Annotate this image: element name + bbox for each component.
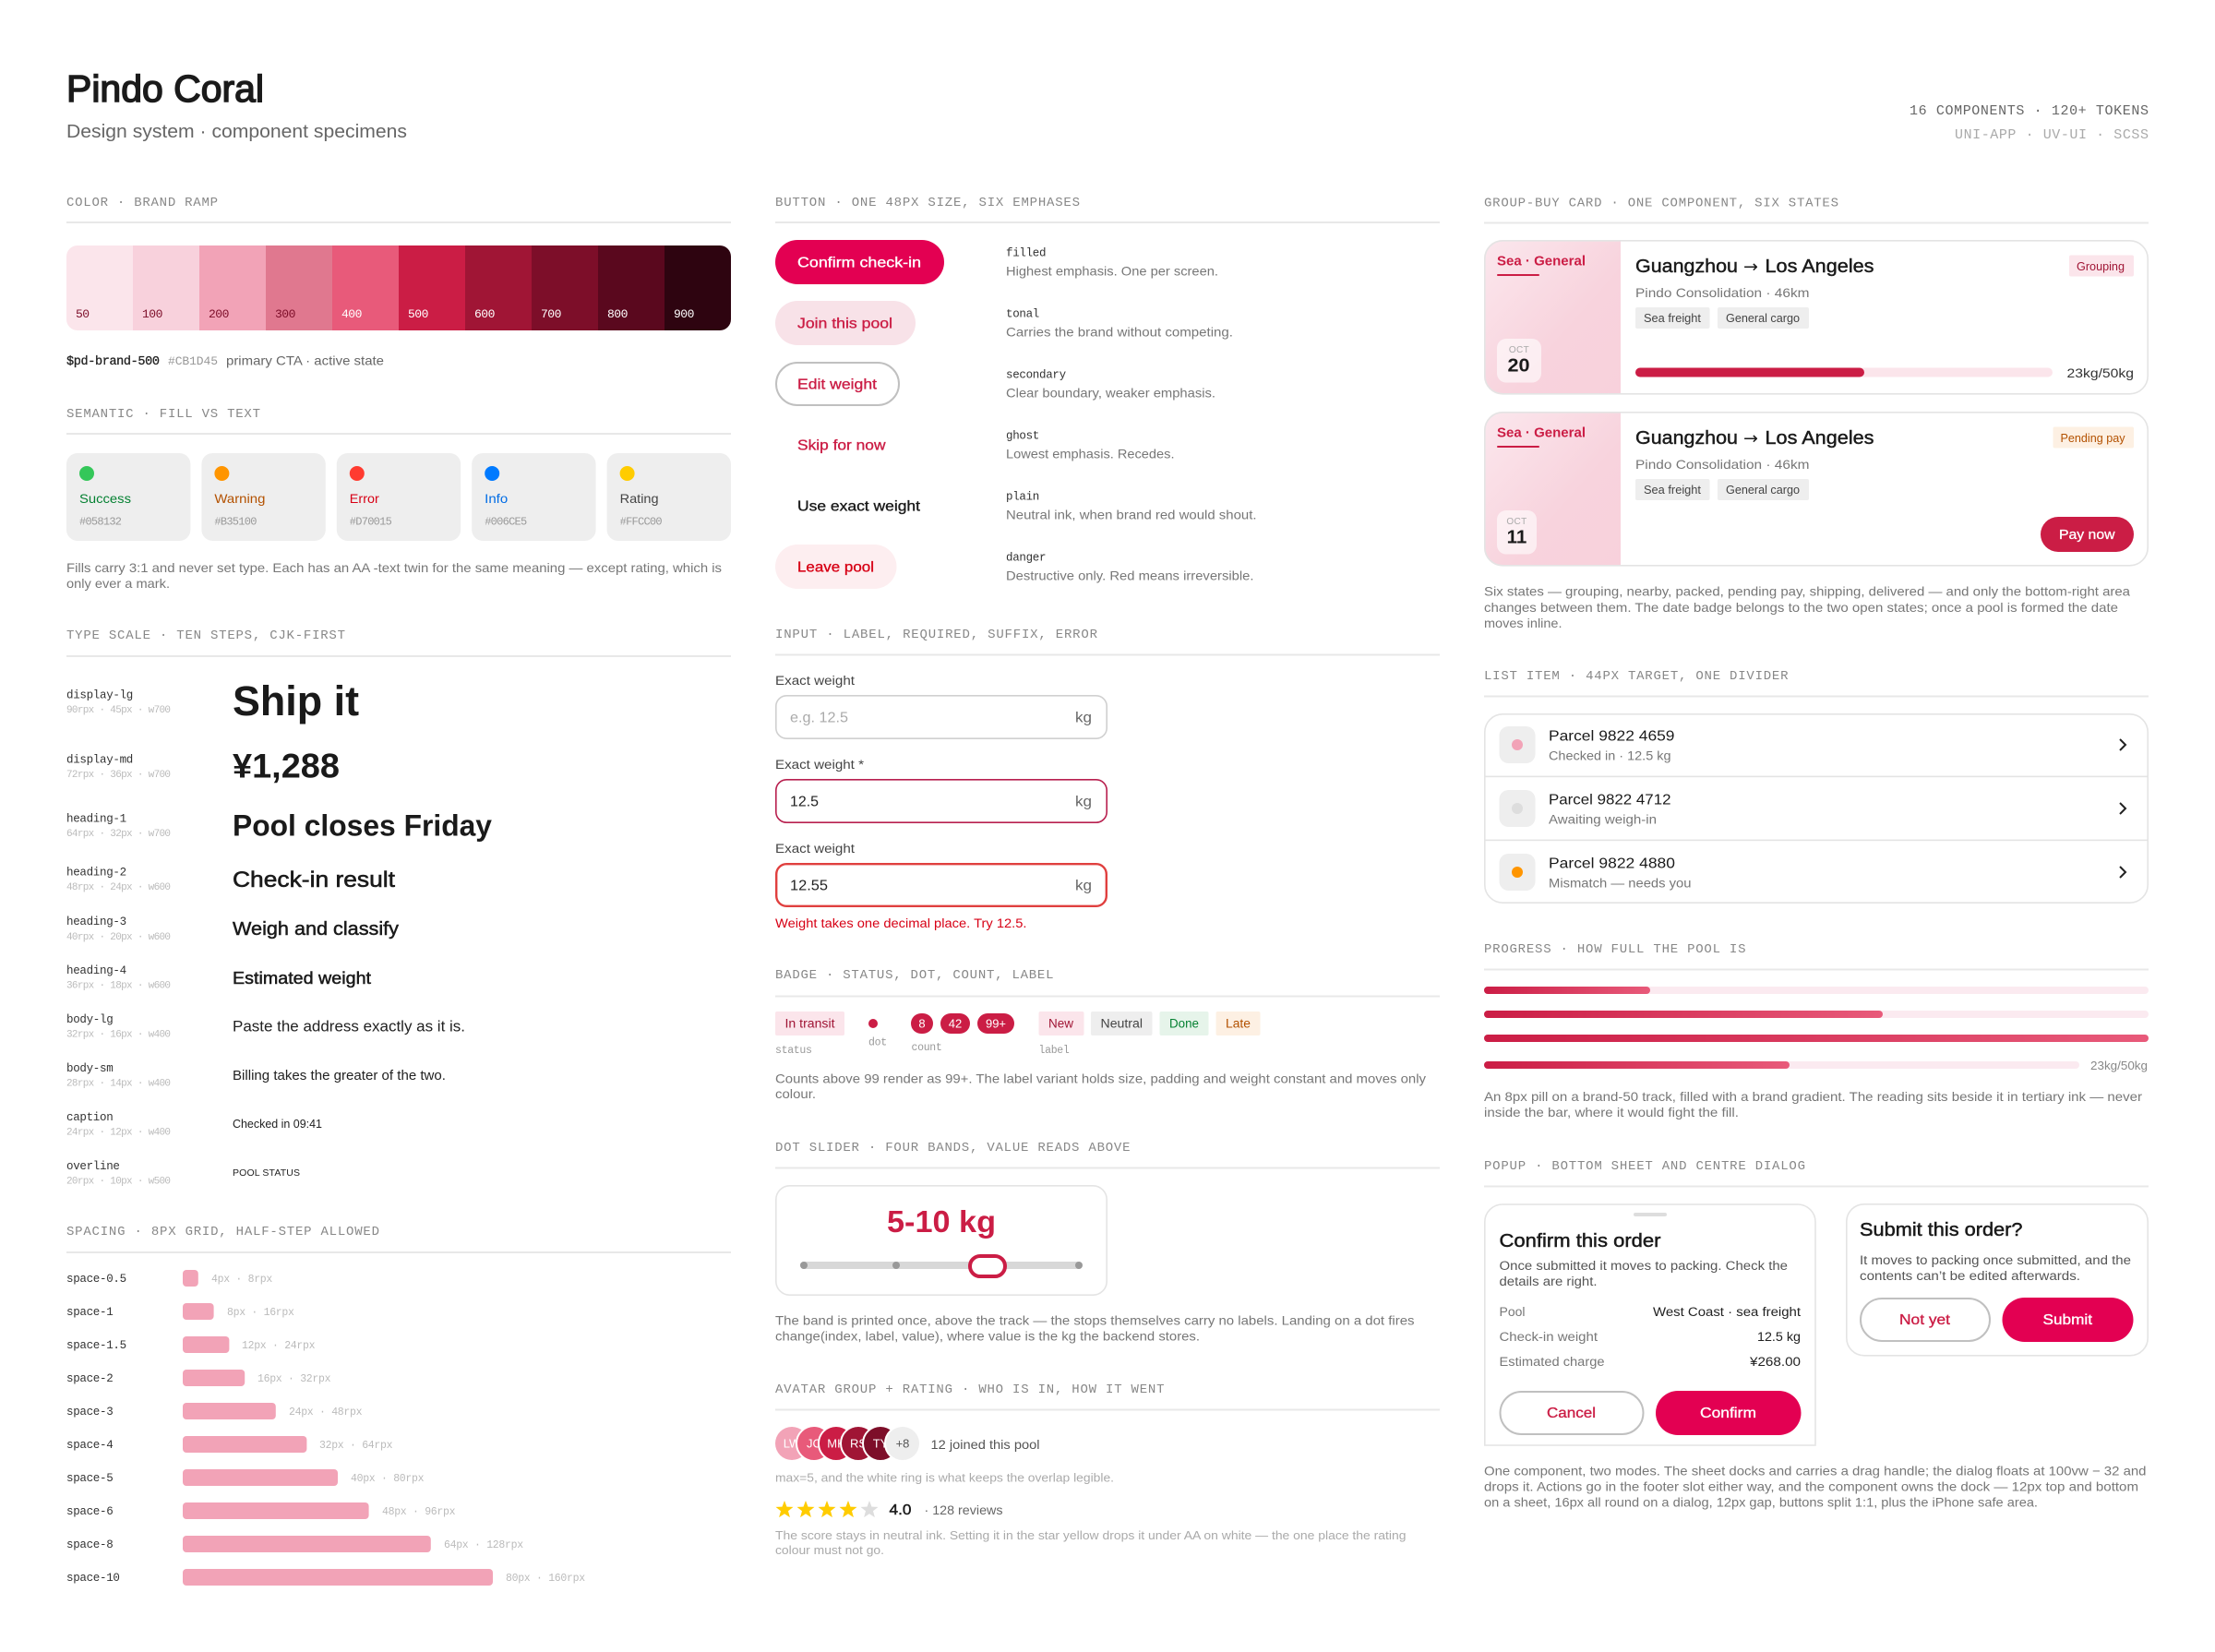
- note: slider: [775, 1312, 1414, 1344]
- colour ramp: 100: [142, 307, 162, 321]
- list row: 4712: Parcel 9822 4712: [1549, 792, 1671, 808]
- card: grouping state: 20: [1508, 354, 1530, 377]
- colour ramp: 400: [341, 307, 362, 321]
- progress bar: 60%: [1484, 1011, 2149, 1018]
- bottom sheet: Confirm: [1700, 1406, 1756, 1421]
- heading: slider: DOT SLIDER · FOUR BANDS, VALUE READS ABOVE: [775, 1141, 1130, 1155]
- row: space-1.5: 12px · 24rpx: [242, 1340, 316, 1352]
- desc: plain: [1006, 491, 1257, 522]
- heading: color: COLOR · BRAND RAMP: [66, 196, 218, 210]
- slider card: [776, 1186, 1107, 1295]
- row: space-10: 80px · 160rpx: [506, 1573, 585, 1585]
- row: space-5: 40px · 80rpx: [351, 1473, 425, 1485]
- row: overline: [66, 1160, 300, 1187]
- card: info: [472, 453, 596, 541]
- progress bar: with reading: [1484, 1059, 2148, 1072]
- bottom sheet: ¥268.00: [1749, 1355, 1801, 1369]
- badge: count: [911, 1013, 1014, 1054]
- row: display-md: ¥1,288: [233, 748, 340, 784]
- avatar group: TY: [873, 1436, 889, 1451]
- card: warning: [201, 453, 326, 541]
- token line: primary CTA · active state: [226, 353, 384, 367]
- heading: badge: BADGE · STATUS, DOT, COUNT, LABEL: [775, 968, 1054, 983]
- desc: plain: Neutral ink, when brand red would shout.: [1006, 508, 1257, 522]
- row: heading-2: 48rpx · 24px · w600: [66, 882, 171, 893]
- row: display-lg: display-lg: [66, 688, 133, 701]
- input: required: 12.5: [790, 794, 819, 810]
- card: success: [66, 453, 190, 541]
- row: space-8: [66, 1536, 523, 1552]
- row: heading-1: Pool closes Friday: [233, 808, 492, 842]
- heading: list: LIST ITEM · 44PX TARGET, ONE DIVIDER: [1484, 669, 1789, 684]
- header meta: [1910, 103, 2149, 143]
- row: caption: [66, 1111, 322, 1139]
- heading: button: BUTTON · ONE 48PX SIZE, SIX EMPHASES: [775, 196, 1080, 210]
- note: progress: inside the bar, where it would fight the fill.: [1484, 1105, 1739, 1119]
- button: danger: [775, 545, 897, 589]
- badge: labels: Neutral: [1100, 1017, 1143, 1030]
- row: caption: caption: [66, 1111, 113, 1124]
- list row: 4880: Parcel 9822 4880: [1549, 856, 1675, 871]
- card title: [1635, 256, 1874, 277]
- desc: tonal: [1006, 308, 1233, 340]
- badge: labels: Late: [1226, 1017, 1251, 1030]
- desc: danger: danger: [1006, 552, 1046, 565]
- centre dialog: It moves to packing once submitted, and the: [1860, 1253, 2131, 1267]
- bottom sheet: Cancel: [1547, 1406, 1596, 1421]
- bottom sheet: details are right.: [1499, 1275, 1597, 1288]
- desc: ghost: ghost: [1006, 430, 1039, 443]
- row: space-1: 8px · 16rpx: [227, 1307, 294, 1319]
- row: body-lg: body-lg: [66, 1013, 113, 1026]
- bottom sheet: West Coast · sea freight: [1653, 1305, 1801, 1319]
- panel: semantic colours: [66, 407, 731, 591]
- row: space-0.5: 4px · 8rpx: [211, 1274, 272, 1286]
- row: space-6: [66, 1502, 456, 1519]
- row: space-10: space-10: [66, 1572, 120, 1585]
- card: success: #058132: [79, 515, 122, 528]
- row: body-sm: body-sm: [66, 1062, 113, 1075]
- desc: tonal: tonal: [1006, 308, 1039, 321]
- row: space-3: 24px · 48rpx: [289, 1407, 363, 1419]
- card: pending pay state: Pay now: [2059, 527, 2115, 543]
- badge: status: In transit: [784, 1017, 835, 1030]
- colour ramp: 500: [408, 307, 428, 321]
- row: body-sm: 28rpx · 14px · w400: [66, 1078, 171, 1089]
- desc: plain: plain: [1006, 491, 1039, 504]
- input: required: [775, 758, 1107, 822]
- note: popup: on a sheet, 16px all round on a dialog, 12px gap, buttons split 1:1, plus the iPhone safe area.: [1484, 1495, 2038, 1510]
- list row: 4712: [1499, 790, 2125, 827]
- note: popup: One component, two modes. The sheet docks and carries a drag handle; the dialog floats at 100vw − 32 and: [1484, 1464, 2147, 1478]
- card: pending pay state: Sea freight: [1644, 484, 1702, 497]
- avatar group: LW: [784, 1436, 801, 1451]
- note: progress: An 8px pill on a brand-50 track, filled with a brand gradient. The reading sits beside it in tertiary ink — never: [1484, 1089, 2142, 1104]
- centre dialog: Not yet: [1899, 1312, 1951, 1328]
- panel: brand ramp: [66, 196, 731, 369]
- note: group-buy: [1484, 583, 2130, 630]
- input: error: Exact weight: [775, 842, 855, 856]
- button: tonal: [775, 301, 916, 345]
- panel: group-buy cards: [1484, 196, 2149, 630]
- centre dialog: Submit this order?: [1860, 1219, 2023, 1240]
- panel: list items: [1484, 669, 2149, 903]
- row: space-0.5: space-0.5: [66, 1273, 126, 1286]
- input: default: Exact weight: [775, 674, 855, 688]
- card title: Guangzhou: [1635, 427, 1738, 449]
- card: grouping state: Sea freight: [1644, 312, 1702, 325]
- input: error: [775, 842, 1107, 930]
- card: grouping state: Sea · General: [1497, 255, 1586, 269]
- note: rating: [775, 1528, 1407, 1557]
- avatar caption: 12 joined this pool: [930, 1437, 1039, 1452]
- note: semantic: Fills carry 3:1 and never set type. Each has an AA -text twin for the same meaning — except rating, which is: [66, 560, 722, 575]
- row: overline: POOL STATUS: [233, 1167, 300, 1179]
- desc: secondary: [1006, 369, 1215, 401]
- card: warning: #B35100: [214, 515, 257, 528]
- badge: count: 8: [918, 1017, 926, 1030]
- card: pending pay state: Pindo Consolidation · 46km: [1635, 457, 1809, 472]
- token line: $pd-brand-500: [66, 355, 160, 369]
- heading: type scale: TYPE SCALE · TEN STEPS, CJK-FIRST: [66, 628, 345, 643]
- card: pending pay state: Pending pay: [2060, 432, 2125, 445]
- list row: 4880: [1499, 854, 2125, 891]
- badge: count: 42: [949, 1017, 962, 1030]
- input: default: e.g. 12.5: [790, 711, 848, 725]
- button: danger: Leave pool: [797, 559, 874, 576]
- colour ramp: 800: [607, 307, 628, 321]
- button: secondary: Edit weight: [797, 377, 878, 393]
- row: heading-3: 40rpx · 20px · w600: [66, 932, 171, 943]
- card: pending pay state: Sea · General: [1497, 426, 1586, 441]
- card title: →: [1743, 257, 1758, 277]
- card: pending pay state: [1484, 412, 2148, 567]
- avatar group: RS: [850, 1436, 867, 1451]
- note: slider: change(index, label, value), where value is the kg the backend stores.: [775, 1329, 1200, 1344]
- header meta: UNI-APP · UV-UI · SCSS: [1955, 127, 2149, 143]
- row: space-4: [66, 1436, 393, 1453]
- row: display-lg: 90rpx · 45px · w700: [66, 705, 171, 716]
- token line: [66, 353, 384, 369]
- bottom sheet: 12.5 kg: [1757, 1330, 1801, 1344]
- row: display-lg: Ship it: [233, 677, 359, 724]
- card title: →: [1743, 429, 1758, 449]
- row: space-3: [66, 1403, 363, 1419]
- card: grouping state: 23kg/50kg: [2067, 365, 2134, 380]
- row: overline: overline: [66, 1160, 120, 1173]
- badge: count: count: [912, 1042, 942, 1054]
- card: warning: Warning: [214, 491, 265, 506]
- progress bar: with reading: 23kg/50kg: [2090, 1059, 2148, 1072]
- row: space-4: 32px · 64rpx: [319, 1440, 393, 1452]
- row: caption: Checked in 09:41: [233, 1118, 322, 1131]
- rating stars: [775, 1501, 879, 1517]
- progress bar: 100%: [1484, 1035, 2149, 1042]
- button: plain: Use exact weight: [797, 498, 921, 515]
- list card: [1485, 714, 2148, 903]
- desc: filled: filled: [1006, 247, 1046, 260]
- input: required: kg: [1075, 794, 1092, 810]
- panel: inputs: [775, 628, 1440, 930]
- list row: 4712: Awaiting weigh-in: [1549, 812, 1657, 827]
- note: semantic: [66, 560, 722, 591]
- row: caption: 24rpx · 12px · w400: [66, 1128, 171, 1139]
- card: pending pay state: 11: [1507, 526, 1527, 548]
- panel: badges: [775, 968, 1440, 1101]
- list row: 4659: Checked in · 12.5 kg: [1549, 749, 1670, 762]
- panel: type scale: [66, 628, 731, 1187]
- card: grouping state: OCT: [1509, 345, 1529, 355]
- card title: Los Angeles: [1765, 427, 1874, 449]
- row: space-4: space-4: [66, 1439, 113, 1452]
- centre dialog: Submit: [2043, 1312, 2093, 1328]
- row: heading-4: Estimated weight: [233, 968, 371, 988]
- row: space-8: space-8: [66, 1538, 113, 1551]
- desc: secondary: Clear boundary, weaker emphasis.: [1006, 386, 1215, 401]
- button: secondary: [776, 363, 899, 405]
- centre dialog: contents can’t be edited afterwards.: [1860, 1269, 2080, 1283]
- row: heading-2: Check-in result: [233, 868, 395, 892]
- colour ramp: 700: [541, 307, 561, 321]
- note: semantic: only ever a mark.: [66, 576, 170, 591]
- row: body-lg: 32rpx · 16px · w400: [66, 1030, 171, 1041]
- bottom sheet: Check-in weight: [1499, 1330, 1598, 1344]
- desc: filled: [1006, 247, 1218, 279]
- card: info: Info: [485, 491, 508, 506]
- row: space-2: space-2: [66, 1372, 113, 1385]
- row: heading-3: heading-3: [66, 916, 126, 928]
- heading: group-buy: GROUP-BUY CARD · ONE COMPONENT, SIX STATES: [1484, 196, 1838, 210]
- note: popup: [1484, 1464, 2147, 1510]
- card: grouping state: Grouping: [2077, 260, 2125, 273]
- panel: buttons: [775, 196, 1440, 589]
- rating score: 4.0: [890, 1502, 912, 1518]
- input: default: kg: [1075, 711, 1092, 725]
- row: body-lg: Paste the address exactly as it is.: [233, 1019, 465, 1035]
- row: display-md: 72rpx · 36px · w700: [66, 770, 171, 781]
- row: body-lg: [66, 1013, 465, 1041]
- avatar group: JC: [807, 1436, 821, 1451]
- note: progress: [1484, 1089, 2142, 1119]
- colour ramp: 600: [474, 307, 495, 321]
- note: rating: colour must not go.: [775, 1543, 884, 1557]
- badge: labels: Done: [1169, 1017, 1199, 1030]
- card: rating: [607, 453, 731, 541]
- row: overline: 20rpx · 10px · w500: [66, 1176, 171, 1187]
- row: heading-1: 64rpx · 32px · w700: [66, 829, 171, 840]
- row: space-2: 16px · 32rpx: [257, 1373, 331, 1385]
- row: heading-4: heading-4: [66, 964, 126, 977]
- badge: status: [775, 1012, 844, 1057]
- centre dialog: [1847, 1204, 2148, 1356]
- card: grouping state: [1484, 240, 2148, 395]
- subtitle: Design system · component specimens: [66, 121, 407, 142]
- bottom sheet: Pool: [1499, 1305, 1525, 1319]
- button: tonal: Join this pool: [797, 316, 892, 332]
- note: rating: The score stays in neutral ink. Setting it in the star yellow drops it under AA on white — the one place the rating: [775, 1528, 1407, 1542]
- list row: 4659: [1499, 726, 2125, 763]
- bottom sheet: [1485, 1204, 1815, 1445]
- card: error: [337, 453, 461, 541]
- row: space-0.5: [66, 1270, 272, 1287]
- note: badge: colour.: [775, 1086, 816, 1101]
- badge: labels: New: [1048, 1017, 1073, 1030]
- list row: 4659: Parcel 9822 4659: [1549, 729, 1675, 744]
- card title: Guangzhou: [1635, 256, 1738, 277]
- row: display-lg: [66, 677, 359, 724]
- card: error: #D70015: [350, 515, 392, 528]
- heading: progress: PROGRESS · HOW FULL THE POOL IS: [1484, 942, 1746, 957]
- desc: ghost: [1006, 430, 1174, 461]
- row: heading-3: [66, 916, 400, 943]
- badge: labels: label: [1039, 1045, 1070, 1057]
- row: heading-2: heading-2: [66, 866, 126, 879]
- colour ramp: 200: [209, 307, 229, 321]
- panel: popup: [1484, 1159, 2149, 1510]
- badge: dot: dot: [868, 1037, 887, 1048]
- panel: dot slider: [775, 1141, 1440, 1344]
- token line: #CB1D45: [168, 354, 218, 368]
- avatar group: MK: [827, 1436, 845, 1451]
- note: slider: The band is printed once, above the track — the stops themselves carry no labels. Landing on a dot fires: [775, 1312, 1414, 1327]
- colour ramp: 900: [674, 307, 694, 321]
- card: pending pay state: General cargo: [1726, 484, 1800, 497]
- panel: spacing: [66, 1225, 731, 1586]
- row: space-2: [66, 1370, 331, 1386]
- row: heading-4: [66, 964, 371, 991]
- title: Pindo Coral: [66, 67, 264, 110]
- colour ramp: [66, 245, 731, 330]
- row: space-6: 48px · 96rpx: [382, 1506, 456, 1518]
- note: badge: Counts above 99 render as 99+. The label variant holds size, padding and weight constant and moves only: [775, 1071, 1426, 1085]
- panel: avatars and rating: [775, 1383, 1440, 1557]
- row: space-10: [66, 1569, 585, 1586]
- badge: dot: [868, 1019, 887, 1048]
- row: space-5: space-5: [66, 1472, 113, 1485]
- card: grouping state: General cargo: [1726, 312, 1800, 325]
- badge: count: 99+: [986, 1017, 1006, 1030]
- input: error: kg: [1075, 879, 1092, 893]
- card title: [1635, 427, 1874, 449]
- desc: danger: [1006, 552, 1253, 583]
- avatar note: max=5, and the white ring is what keeps the overlap legible.: [775, 1471, 1114, 1484]
- panel: progress: [1484, 942, 2149, 1119]
- input: error: Weight takes one decimal place. Try 12.5.: [775, 916, 1026, 930]
- note: popup: drops it. Actions go in the footer slot either way, and the component owns the dock — 12px top and bottom: [1484, 1478, 2138, 1493]
- avatar group: +8: [896, 1436, 909, 1451]
- bottom sheet: Once submitted it moves to packing. Check the: [1499, 1259, 1788, 1273]
- bottom sheet: Estimated charge: [1499, 1355, 1604, 1369]
- heading: popup: POPUP · BOTTOM SHEET AND CENTRE DIALOG: [1484, 1159, 1805, 1174]
- button: filled: Confirm check-in: [797, 255, 921, 271]
- badge: labels: [1039, 1012, 1261, 1057]
- row: body-sm: [66, 1062, 446, 1089]
- row: heading-4: 36rpx · 18px · w600: [66, 980, 171, 991]
- row: space-1.5: [66, 1336, 316, 1353]
- row: space-1.5: space-1.5: [66, 1339, 126, 1352]
- list row: 4880: Mismatch — needs you: [1549, 877, 1691, 890]
- row: heading-2: [66, 866, 395, 893]
- bottom sheet: Confirm this order: [1499, 1230, 1661, 1251]
- note: badge: [775, 1071, 1426, 1101]
- row: space-1: space-1: [66, 1306, 113, 1319]
- row: body-sm: Billing takes the greater of the two.: [233, 1069, 446, 1083]
- card: error: Error: [350, 491, 379, 506]
- heading: spacing: SPACING · 8PX GRID, HALF-STEP ALLOWED: [66, 1225, 379, 1239]
- row: heading-1: heading-1: [66, 812, 126, 825]
- row: display-md: [66, 748, 340, 784]
- card: rating: #FFCC00: [620, 515, 663, 528]
- row: display-md: display-md: [66, 753, 133, 766]
- row: heading-1: [66, 808, 492, 842]
- button: filled: [775, 240, 944, 284]
- card: info: #006CE5: [485, 515, 527, 528]
- row: space-3: space-3: [66, 1406, 113, 1419]
- desc: tonal: Carries the brand without competing.: [1006, 325, 1233, 340]
- card: pending pay state: OCT: [1506, 517, 1527, 527]
- input: default: [775, 674, 1107, 738]
- heading: input: INPUT · LABEL, REQUIRED, SUFFIX, ERROR: [775, 628, 1098, 642]
- row: heading-3: Weigh and classify: [233, 918, 400, 940]
- colour ramp: 300: [275, 307, 295, 321]
- header meta: 16 COMPONENTS · 120+ TOKENS: [1910, 103, 2149, 119]
- card title: Los Angeles: [1765, 256, 1874, 277]
- heading: semantic: SEMANTIC · FILL VS TEXT: [66, 407, 260, 422]
- row: space-5: [66, 1469, 425, 1486]
- badge: status: status: [775, 1045, 812, 1057]
- note: group-buy: Six states — grouping, nearby, packed, pending pay, shipping, delivered — and only the bottom-right area: [1484, 583, 2130, 598]
- button: ghost: Skip for now: [797, 437, 886, 454]
- heading: avatars: AVATAR GROUP + RATING · WHO IS IN, HOW IT WENT: [775, 1383, 1165, 1397]
- progress bar: 25%: [1484, 987, 2149, 994]
- note: group-buy: moves inline.: [1484, 616, 1562, 630]
- slider card: 5-10 kg: [887, 1204, 996, 1239]
- note: group-buy: changes between them. The date badge belongs to the two open states; once a pool is formed the date: [1484, 600, 2118, 615]
- avatar group: [775, 1426, 920, 1461]
- desc: danger: Destructive only. Red means irreversible.: [1006, 569, 1253, 583]
- rating count: · 128 reviews: [925, 1502, 1002, 1517]
- row: space-1: [66, 1303, 294, 1320]
- colour ramp: 50: [76, 307, 90, 321]
- card: rating: Rating: [620, 491, 659, 506]
- input: required: Exact weight *: [775, 758, 865, 772]
- desc: filled: Highest emphasis. One per screen.: [1006, 264, 1218, 279]
- row: space-6: space-6: [66, 1505, 113, 1518]
- desc: secondary: secondary: [1006, 369, 1067, 382]
- desc: ghost: Lowest emphasis. Recedes.: [1006, 447, 1174, 461]
- card: success: Success: [79, 491, 131, 506]
- row: space-8: 64px · 128rpx: [444, 1539, 523, 1551]
- card: grouping state: Pindo Consolidation · 46km: [1635, 285, 1809, 300]
- input: error: 12.55: [790, 879, 828, 893]
